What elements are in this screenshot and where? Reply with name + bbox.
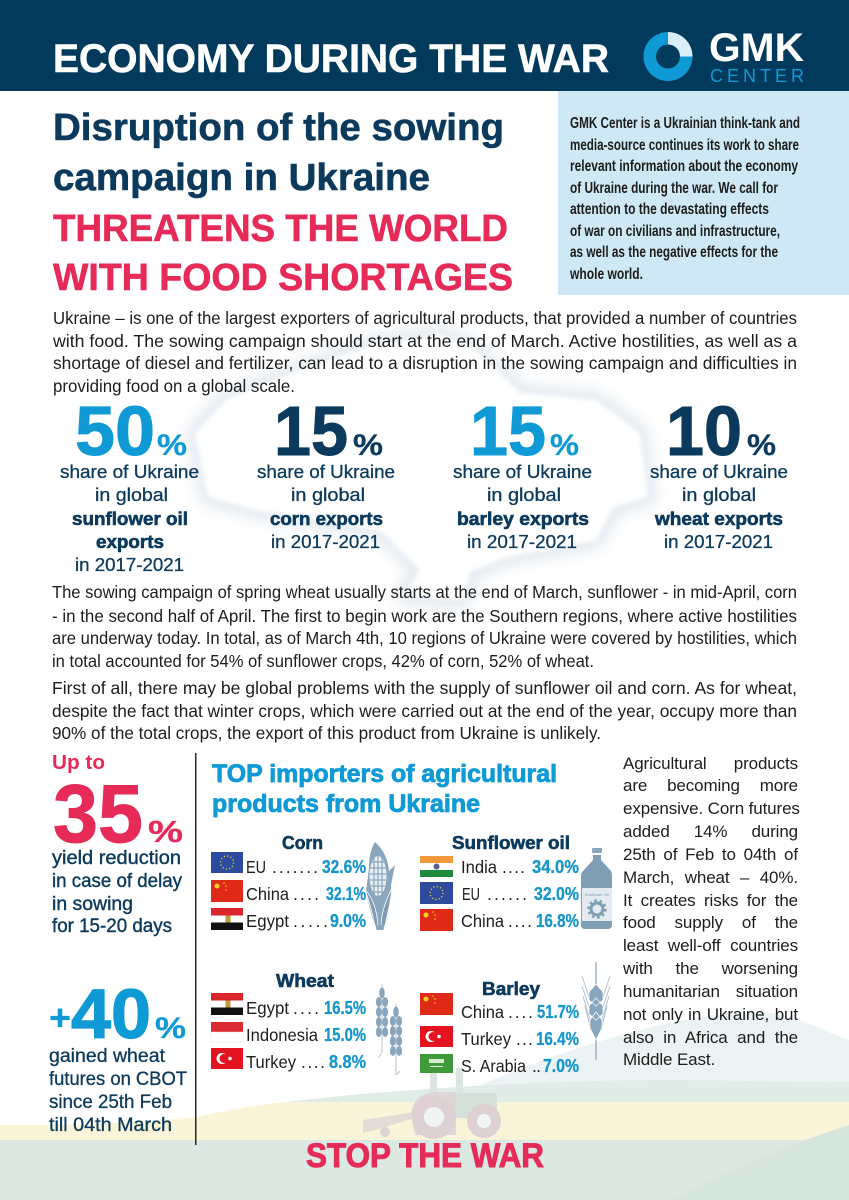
importers: barley: S. Arabia [461, 1056, 526, 1076]
intro paragraph [52, 308, 797, 396]
right column text block: March, wheat – 40%. [623, 868, 798, 887]
importers: sunflower oil: .... [508, 911, 532, 931]
flag: Turkey [420, 1026, 453, 1047]
importers: wheat: Turkey [246, 1052, 296, 1072]
stat: 10% wheat: share of Ukraine [650, 462, 788, 482]
importers: sunflower oil: 32.0% [534, 884, 579, 904]
stat: 10% wheat: 10 [666, 392, 742, 470]
right column text block [623, 754, 800, 1069]
importers: wheat: 15.0% [324, 1025, 366, 1045]
panel: about GMK Center: as well as the negative effects for the [570, 244, 778, 261]
icon: oil bottle [581, 848, 612, 929]
paragraph: sowing campaign: are underway today. In total, as of March 4th, 10 regions of Ukraine were covered by hostilities, which [52, 628, 797, 648]
stat: 15% barley: in 2017-2021 [467, 532, 577, 552]
flag: China [211, 880, 243, 902]
stat: +40% [49, 975, 187, 1136]
importers: corn: China [246, 884, 289, 904]
stat: 15% barley: share of Ukraine [453, 462, 592, 482]
background: landscape [0, 1012, 849, 1200]
right column text block: Agricultural products [623, 754, 798, 772]
importers: sunflower oil: 34.0% [532, 857, 579, 877]
importers: corn: ..... [293, 911, 328, 931]
stat: up to 35% [52, 752, 183, 937]
stat: 15% barley: barley exports [457, 509, 589, 529]
main heading: Disruption of the sowing [53, 107, 504, 149]
paragraph: global problems: First of all, there may be global problems with the supply of sunflower oil and corn. As for wheat, [52, 678, 797, 698]
flag: China [420, 909, 453, 931]
header bar [0, 0, 849, 91]
paragraph: sowing campaign: - in the second half of April. The first to begin work are the Southern regions, where active hostilities [52, 606, 797, 626]
right column text block: not only in Ukraine, but [623, 1005, 798, 1024]
importers: wheat: Egypt [246, 998, 289, 1018]
stat: 15% corn: corn exports [270, 509, 383, 529]
importers: corn: ....... [272, 857, 318, 877]
flag: EU [211, 852, 243, 873]
stat: 10% wheat: wheat exports [654, 509, 783, 529]
paragraph: global problems: despite the fact that winter crops, which were carried out at the end of the year, occupy more than [52, 701, 797, 721]
right column text block: also in Africa and the [623, 1028, 798, 1047]
intro paragraph: Ukraine – is one of the largest exporters of agricultural products, that provided a number of countries [53, 308, 797, 328]
stat: up to 35%: % [148, 814, 183, 849]
stat: 15% corn: 15 [274, 392, 348, 470]
stat: +40%: till 04th March [49, 1115, 172, 1136]
importers: barley: 51.7% [537, 1002, 579, 1022]
importers: wheat: 16.5% [324, 998, 366, 1018]
importers: sunflower oil: Sunflower oil [452, 833, 570, 853]
stat: 50% sunflower oil: % [157, 429, 187, 462]
stat: up to 35%: for 15-20 days [52, 916, 172, 937]
right column text block: 25th of Feb to 04th of [623, 845, 798, 864]
main heading: campaign in Ukraine [53, 157, 430, 199]
background: Ukraine map [195, 335, 648, 600]
stat: 50% sunflower oil: exports [96, 532, 164, 552]
flag: Indonesia [211, 1022, 243, 1042]
importers: barley [420, 962, 610, 1076]
importers: corn [211, 833, 395, 931]
vertical divider [195, 753, 196, 1145]
flag: Egypt [211, 993, 243, 1015]
stat: 10% wheat: in 2017-2021 [664, 532, 773, 552]
icon: barley ear [582, 962, 610, 1060]
importers: corn: 32.6% [322, 857, 366, 877]
main heading: THREATENS THE WORLD [53, 208, 508, 250]
importers heading: products from Ukraine [212, 790, 480, 818]
importers: sunflower oil: .... [502, 857, 525, 877]
right column text block: food supply of the [623, 913, 798, 932]
stat: up to 35%: in sowing [52, 894, 133, 915]
stat: up to 35%: yield reduction [52, 848, 181, 869]
stat: 15% corn: share of Ukraine [257, 462, 395, 482]
intro paragraph: with food. The sowing campaign should start at the end of March. Active hostilities, as well as a [52, 331, 797, 351]
stat: +40%: futures on CBOT [49, 1069, 187, 1090]
stat: up to 35%: in case of delay [52, 871, 182, 892]
importers: corn: 32.1% [326, 884, 366, 904]
right column text block: with the worsening [623, 959, 798, 978]
importers: barley: Turkey [461, 1029, 511, 1049]
importers: sunflower oil: ...... [487, 884, 527, 904]
panel: about GMK Center: of war on civilians and infrastructure, [570, 223, 780, 240]
stat: 15% barley [453, 392, 592, 552]
importers: barley: .. [532, 1056, 541, 1076]
intro paragraph: shortage of diesel and fertilizer, can lead to a disruption in the sowing campaign and difficulties in [53, 353, 797, 373]
importers: corn: 9.0% [330, 911, 366, 931]
stat: 50% sunflower oil: share of Ukraine [60, 462, 199, 482]
importers: corn: .... [293, 884, 319, 904]
importers: barley: China [461, 1002, 504, 1022]
importers: wheat: .... [301, 1052, 325, 1072]
stat: 50% sunflower oil: sunflower oil [72, 509, 188, 529]
right column text block: least well-off countries [623, 936, 798, 955]
main heading [53, 107, 513, 299]
panel: about GMK Center: of Ukraine during the war. We call for [570, 180, 778, 197]
importers: corn: Egypt [246, 911, 289, 931]
stat: +40%: gained wheat [49, 1046, 166, 1067]
header title: ECONOMY DURING THE WAR [53, 37, 609, 81]
panel: about GMK Center: attention to the devastating effects [570, 201, 769, 218]
panel: about GMK Center [558, 91, 849, 295]
stat: up to 35%: 35 [53, 767, 143, 860]
stat: 15% barley: % [550, 429, 579, 462]
importers: barley: ... [516, 1029, 533, 1049]
stat: 10% wheat [650, 392, 788, 552]
icon: wheat ears [376, 984, 402, 1075]
importers: wheat: Wheat [276, 971, 334, 991]
right column text block: It creates risks for the [623, 891, 798, 910]
panel: about GMK Center: whole world. [569, 266, 643, 283]
flag: Egypt [211, 908, 243, 930]
stat: +40%: + [49, 997, 71, 1038]
importers: sunflower oil: 16.8% [536, 911, 579, 931]
logo: GMK Center: CENTER [710, 66, 804, 86]
stat: +40%: % [155, 1012, 186, 1045]
flag: Saudi Arabia [420, 1054, 453, 1073]
importers: wheat: .... [293, 998, 319, 1018]
stat: 50% sunflower oil: in 2017-2021 [75, 555, 184, 575]
stat: 15% corn: % [353, 429, 383, 462]
importers: barley: .... [508, 1002, 533, 1022]
importers: wheat: Indonesia [246, 1025, 318, 1045]
icon: oil bottle: Sunflower Oil [585, 893, 609, 897]
flag: Turkey [211, 1048, 243, 1069]
importers: barley: 7.0% [543, 1056, 579, 1076]
right column text block: humanitarian situation [623, 982, 798, 1001]
flag: India [420, 856, 453, 877]
stat: 15% corn: in 2017-2021 [271, 532, 380, 552]
paragraph: sowing campaign [52, 582, 797, 671]
importers: corn: EU [246, 857, 266, 877]
stat: 15% barley: 15 [470, 392, 546, 470]
right column text block: Middle East. [623, 1050, 715, 1069]
importers: sunflower oil: EU [462, 884, 480, 904]
right column text block: added 14% during [623, 822, 798, 841]
importers: barley: 16.4% [536, 1029, 579, 1049]
logo: GMK Center [644, 26, 804, 86]
importers: sunflower oil [420, 833, 612, 931]
stat: 50% sunflower oil: 50 [75, 392, 155, 470]
stat: +40%: 40 [71, 975, 151, 1053]
importers heading [212, 760, 557, 818]
right column text block: are becoming more [623, 776, 798, 795]
flag: EU [420, 882, 453, 904]
importers: wheat: 8.8% [329, 1052, 366, 1072]
stat: 15% barley: in global [487, 485, 561, 505]
stat: up to 35%: Up to [52, 752, 105, 774]
intro paragraph: providing food on a global scale. [53, 376, 295, 396]
stat: 50% sunflower oil: in global [95, 485, 168, 505]
icon: corn cob [365, 842, 395, 930]
right column text block: expensive. Corn futures [623, 799, 800, 818]
paragraph: sowing campaign: in total accounted for 54% of sunflower crops, 42% of corn, 52% of wheat. [52, 651, 594, 671]
importers: wheat [211, 971, 402, 1075]
stat: 15% corn [257, 392, 395, 552]
main heading: WITH FOOD SHORTAGES [53, 257, 513, 299]
flag: China [420, 993, 453, 1015]
importers: corn: Corn [282, 833, 323, 853]
tractor silhouette [363, 1068, 501, 1139]
stat: 10% wheat: % [747, 429, 776, 462]
stat: +40%: since 25th Feb [49, 1092, 172, 1113]
importers heading: TOP importers of agricultural [212, 760, 557, 788]
paragraph: global problems: 90% of the total crops, the export of this product from Ukraine is unlikely. [52, 723, 601, 743]
stat: 15% corn: in global [291, 485, 365, 505]
importers: barley: Barley [482, 979, 540, 999]
call to action: stop the war: STOP THE WAR [306, 1137, 544, 1175]
paragraph: global problems [52, 678, 797, 743]
importers: sunflower oil: India [461, 857, 497, 877]
importers: sunflower oil: China [461, 911, 504, 931]
logo: GMK Center: GMK [709, 26, 804, 70]
stat: 50% sunflower oil [60, 392, 199, 575]
paragraph: sowing campaign: The sowing campaign of spring wheat usually starts at the end of March, sunflower - in mid-April, corn [52, 582, 797, 602]
stat: 10% wheat: in global [682, 485, 756, 505]
